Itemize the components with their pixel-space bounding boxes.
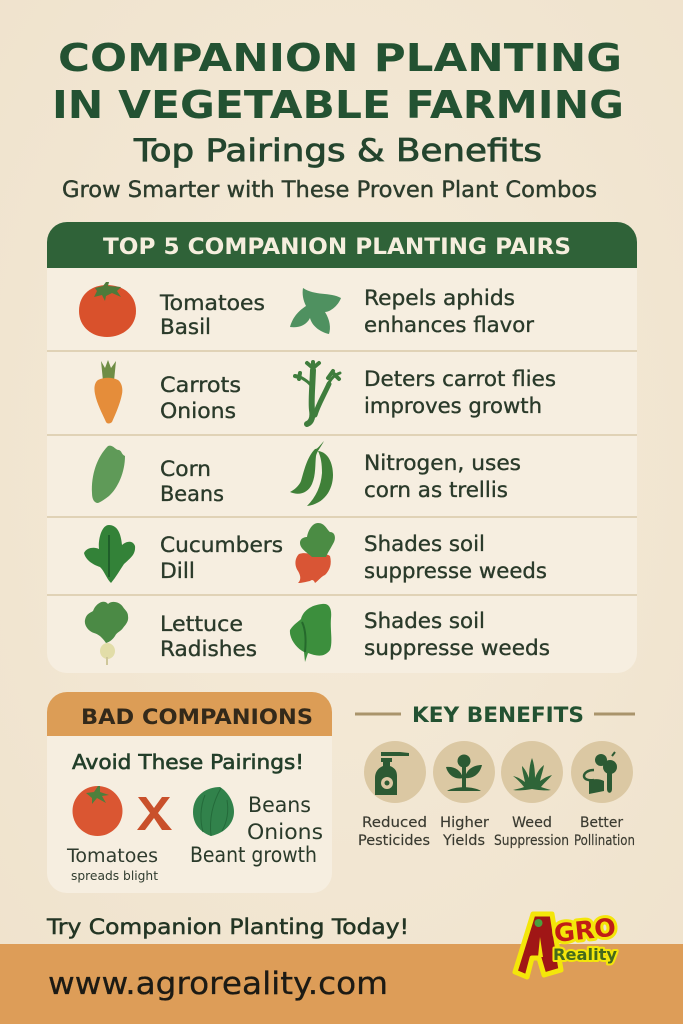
icon: bean leaf bbox=[193, 787, 234, 836]
benefit: higher yields bbox=[433, 741, 495, 849]
icon: bean pods bbox=[290, 441, 333, 506]
panel: top 5 pairs bbox=[47, 222, 637, 673]
benefit: better pollination: Better bbox=[580, 815, 623, 831]
bad pair names bbox=[190, 793, 323, 867]
row 4: cucumbers and dill bbox=[84, 523, 547, 583]
row 5: lettuce and radishes: Lettuce bbox=[160, 612, 243, 636]
benefit text: improves growth bbox=[364, 394, 542, 418]
benefit text: Deters carrot flies bbox=[364, 367, 556, 391]
icon: corn leaf bbox=[92, 446, 125, 503]
tomato caption bbox=[66, 845, 158, 883]
benefit text: Shades soil bbox=[364, 609, 485, 633]
benefit text: enhances flavor bbox=[364, 313, 534, 337]
icon: basil bbox=[290, 288, 341, 334]
heading: key benefits: KEY BENEFITS bbox=[412, 703, 584, 728]
panel header: TOP 5 COMPANION PLANTING PAIRS bbox=[103, 234, 571, 260]
logo: Agro Reality: GRO bbox=[553, 913, 617, 948]
row 3: corn and beans: Corn bbox=[160, 457, 211, 481]
icon: carrot bbox=[94, 360, 122, 424]
icon: radish leaf bbox=[290, 604, 331, 662]
row 2: carrots and onions bbox=[94, 360, 556, 424]
title: IN VEGETABLE FARMING bbox=[52, 83, 624, 127]
icon: tomato bbox=[79, 282, 136, 337]
bad pair names: Beans bbox=[248, 793, 311, 817]
benefit: weed suppression: Weed bbox=[512, 815, 552, 831]
tomato caption: Tomatoes bbox=[66, 845, 158, 867]
row 3: corn and beans bbox=[92, 441, 521, 506]
subtitle: Top Pairings & Benefits bbox=[133, 133, 542, 169]
row 2: carrots and onions: Carrots bbox=[160, 373, 241, 397]
call to action: Try Companion Planting Today! bbox=[46, 915, 409, 939]
benefit text: Shades soil bbox=[364, 532, 485, 556]
row 4: cucumbers and dill: Cucumbers bbox=[160, 533, 283, 557]
row 4: cucumbers and dill: Dill bbox=[160, 559, 195, 583]
icon: cucumber leaf bbox=[84, 525, 135, 583]
benefit: higher yields: Higher bbox=[440, 815, 489, 831]
row 1: tomatoes and basil: Tomatoes bbox=[159, 291, 265, 315]
row 5: lettuce and radishes bbox=[85, 602, 550, 665]
logo: Agro Reality: Reality bbox=[553, 945, 618, 964]
benefit: better pollination bbox=[571, 741, 635, 849]
row 1: tomatoes and basil bbox=[79, 282, 534, 339]
icon: tomato bbox=[72, 786, 122, 836]
benefit text: Nitrogen, uses bbox=[364, 451, 521, 475]
tomato caption: spreads blight bbox=[71, 869, 158, 883]
logo: Agro Reality bbox=[515, 913, 618, 977]
icon: spray bottle bbox=[375, 752, 409, 795]
row 2: carrots and onions: Onions bbox=[160, 399, 236, 423]
website url: www.agroreality.com bbox=[48, 966, 388, 1002]
icon: bee bbox=[584, 752, 617, 794]
avoid heading: Avoid These Pairings! bbox=[72, 750, 304, 774]
footer band bbox=[0, 944, 683, 1024]
benefit: reduced pesticides: Reduced bbox=[362, 815, 427, 831]
benefit: better pollination: Pollination bbox=[574, 833, 635, 849]
panel header bbox=[47, 222, 637, 268]
benefit text: corn as trellis bbox=[364, 478, 508, 502]
row 5: lettuce and radishes: Radishes bbox=[160, 637, 257, 661]
row 1: tomatoes and basil: Basil bbox=[160, 315, 211, 339]
benefit text: suppresse weeds bbox=[364, 559, 547, 583]
tagline: Grow Smarter with These Proven Plant Combos bbox=[62, 178, 597, 203]
title: COMPANION PLANTING bbox=[58, 36, 622, 80]
title bbox=[52, 36, 624, 127]
benefit: higher yields: Yields bbox=[442, 833, 485, 849]
row 3: corn and beans: Beans bbox=[160, 482, 224, 506]
benefit: reduced pesticides: Pesticides bbox=[358, 833, 430, 849]
bad pair names: Onions bbox=[247, 820, 323, 844]
bad pair names: Beant growth bbox=[190, 843, 317, 867]
icon: weed bbox=[513, 758, 552, 790]
icon: cross bbox=[137, 797, 172, 830]
bad companions header: BAD COMPANIONS bbox=[81, 705, 313, 730]
benefit: reduced pesticides bbox=[358, 741, 430, 849]
bad companions header bbox=[47, 692, 332, 736]
benefit: weed suppression: Suppression bbox=[494, 833, 569, 849]
icon: onion greens bbox=[295, 362, 340, 424]
icon: lettuce with root bbox=[85, 602, 128, 665]
benefit text: suppresse weeds bbox=[364, 636, 550, 660]
benefit: weed suppression bbox=[494, 741, 569, 849]
icon: radishes bbox=[295, 523, 335, 583]
benefit text: Repels aphids bbox=[364, 286, 515, 310]
icon: sprout bbox=[446, 754, 482, 791]
panel: bad companions bbox=[47, 692, 332, 893]
